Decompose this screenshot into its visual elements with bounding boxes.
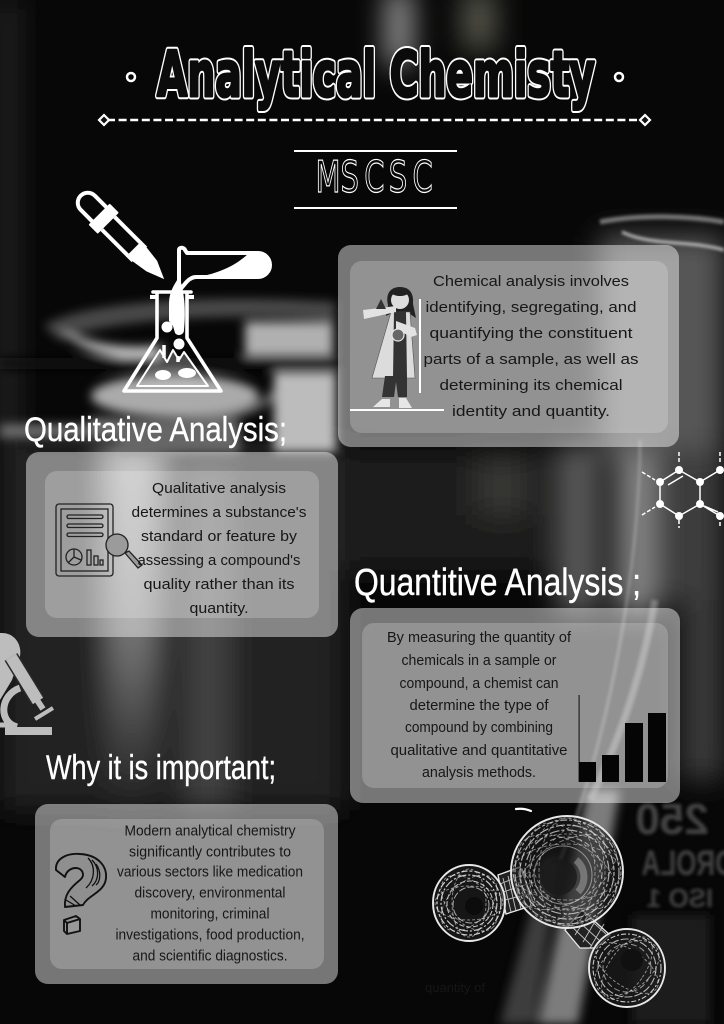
- icon: dropper: [70, 185, 175, 290]
- text: chemical analysis description: determining its chemical: [440, 378, 622, 394]
- atom: left: [431, 865, 507, 941]
- text: quantitive description: determine the type of: [410, 698, 549, 714]
- icon: test tube: [169, 248, 270, 335]
- text: qualitative description: determines a substance's: [132, 505, 306, 521]
- text: quantitive description: qualitative and quantitative: [390, 743, 568, 759]
- text: importance description: various sectors like medication: [117, 864, 303, 880]
- bond: right: [565, 910, 610, 948]
- title bullet dots: [127, 73, 623, 81]
- text: qualitative description: quantity.: [190, 601, 248, 617]
- text: chemical analysis description: identity and quantity.: [452, 404, 610, 420]
- text: chemical analysis description: quantifying the constituent: [430, 326, 632, 342]
- background lettering on beaker: [635, 795, 724, 913]
- panel: qualitative analysis: [26, 452, 338, 637]
- text: importance description: and scientific diagnostics.: [132, 948, 288, 964]
- text: qualitative description: quality rather than its: [144, 577, 294, 593]
- text: importance description: investigations, food production,: [116, 928, 304, 944]
- text: quantitive description: chemicals in a sample or: [402, 653, 557, 669]
- text: importance description: significantly contributes to: [129, 844, 291, 860]
- bar chart: [578, 695, 666, 782]
- heading: Qualitative Analysis: Qualitative Analysis;: [24, 411, 287, 449]
- illustration: wireframe molecule: [431, 809, 669, 1008]
- panel: quantitive analysis: [350, 608, 680, 803]
- text: qualitative description: standard or feature by: [141, 529, 298, 545]
- heading: Quantitive Analysis: Quantitive Analysis ;: [354, 562, 641, 604]
- text: importance description: [116, 824, 304, 964]
- bond: left: [498, 867, 536, 914]
- text: importance description: Modern analytical chemistry: [124, 824, 296, 840]
- text: importance description: monitoring, criminal: [150, 906, 270, 922]
- illustration: scientist with flask: [363, 287, 417, 408]
- atom: right: [585, 928, 669, 1008]
- icon: microscope: [0, 633, 53, 735]
- icon: hexagon molecule: [642, 452, 724, 528]
- atom: large centre: [505, 810, 629, 934]
- faint background caption: quantity of: [425, 980, 485, 995]
- text: qualitative description: [132, 481, 306, 617]
- text: quantitive description: analysis methods.: [422, 765, 536, 781]
- text: qualitative description: Qualitative analysis: [152, 481, 286, 497]
- panel: chemical analysis: [338, 245, 679, 447]
- text: quantitive description: [387, 630, 572, 781]
- text: quantitive description: By measuring the quantity of: [387, 630, 572, 646]
- text: importance description: discovery, environmental: [134, 886, 286, 902]
- icon: flask: [124, 292, 221, 391]
- text: chemical analysis description: parts of a sample, as well as: [424, 352, 638, 368]
- text: qualitative description: assessing a compound's: [138, 553, 300, 569]
- icon: report with magnifier: [56, 504, 142, 576]
- text: chemical analysis description: identifying, segregating, and: [426, 300, 636, 316]
- heading: Why it is important: Why it is important;: [46, 749, 276, 787]
- panel: why it is important: [35, 804, 338, 984]
- glass bowl: [0, 299, 340, 454]
- text: quantitive description: compound by combining: [405, 720, 553, 736]
- text: quantitive description: compound, a chemist can: [400, 676, 558, 692]
- subtitle block: MSCSC: MSCSC: [315, 151, 433, 203]
- dashed divider with diamonds: [99, 115, 650, 125]
- background lettering on beaker: 250: [635, 795, 709, 844]
- icon: question mark: [56, 854, 106, 934]
- text: chemical analysis description: Chemical analysis involves: [433, 274, 629, 290]
- text: chemical analysis description: [424, 274, 638, 420]
- background lettering on beaker: ISO 1: [647, 883, 713, 913]
- streaks: [560, 217, 724, 860]
